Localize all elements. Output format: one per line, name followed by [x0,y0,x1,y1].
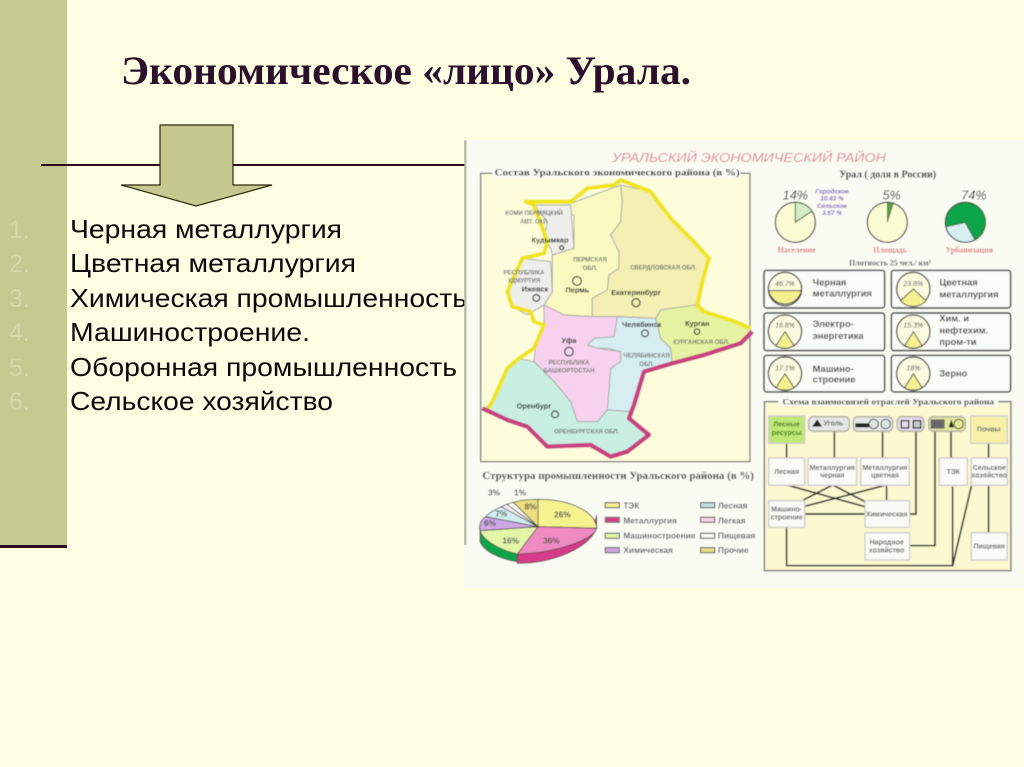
panel: industry links diagram: хозяйство [869,546,904,554]
sidebar list numbers: 1. [9,216,30,244]
panel: industry structure pie: Легкая [718,515,746,525]
panel title: УРАЛЬСКИЙ ЭКОНОМИЧЕСКИЙ РАЙОН [611,149,887,165]
panel: industry structure pie: Металлургия [623,515,677,525]
map labels: РЕСПУБЛИКА [504,270,545,276]
panel: region map: Пермь [565,286,590,295]
panel: share in Russia: металлургия [939,290,999,300]
pie: population: 3.57 % [822,210,842,217]
panel: industry links diagram: Схема взаимосвязей отраслей Уральского района [782,396,995,406]
panel: share in Russia: 23.8% [902,281,923,288]
pie: area: Площадь [873,245,908,254]
panel: industry links diagram: ТЭК [947,469,961,476]
panel: industry links diagram: Химическая [866,511,907,518]
panel: share in Russia: Цветная [939,277,978,287]
panel: industry links diagram: цветная [871,473,899,480]
panel: share in Russia: 18% [906,365,920,372]
map labels: ОБЛ. [639,362,654,368]
map labels: УДМУРТИЯ [508,279,540,285]
pie: urbanisation: Урбанизация [946,245,994,254]
map labels: СВЕРДЛОВСКАЯ ОБЛ. [630,265,697,271]
map labels: ОБЛ. [583,266,598,272]
panel: industry structure pie: Прочие [718,545,749,555]
pie: urbanisation: 74% [961,189,987,203]
sector boxes [769,458,1007,560]
panel: industry structure pie: 6% [484,518,497,528]
panel: industry structure pie: 16% [502,535,520,545]
panel: share in Russia: Зерно [939,368,968,378]
panel: industry links diagram: Почвы [977,427,1000,434]
panel: share in Russia: Электро- [813,319,854,329]
panel: share in Russia: 16.8% [775,323,795,330]
sidebar list numbers [9,216,30,416]
panel: share in Russia: нефтехим. [939,326,988,336]
map labels: АВТ. ОКР. [520,219,548,225]
panel: region map: Ижевск [522,285,549,294]
panel: industry links diagram: строение [771,514,803,521]
panel: industry links diagram: черная [820,473,845,480]
panel: industry links diagram: Металлургия [862,465,908,472]
panel: industry links diagram: Металлургия [810,465,855,472]
panel: industry links diagram: Пищевая [974,544,1005,551]
map labels: КОМИ ПЕРМЯЦКИЙ [505,209,563,217]
panel: industry links diagram: Лесная [774,469,799,476]
industries list: Оборонная промышленность [70,352,457,382]
sidebar list numbers: 6. [9,388,30,416]
industries list: Машиностроение. [70,317,310,347]
industries list: Черная металлургия [70,214,342,244]
panel: region map: Кудымкар [532,235,569,244]
map labels: БАШКОРТОСТАН [544,368,594,374]
left sidebar band [0,0,67,548]
panel: share in Russia [764,169,1011,392]
panel: share in Russia: Урал ( доля в России) [839,169,936,180]
panel: industry structure pie: 3% [488,487,501,497]
industries list [70,214,467,416]
panel: industry structure pie: Пищевая [718,530,755,540]
pie: population: 10.43 % [820,196,844,203]
panel: industry links diagram: Народное [870,539,904,546]
panel: region map [481,168,752,462]
panel: industry links diagram: ресурсы [772,430,802,437]
resource boxes [769,416,1007,443]
panel: industry structure pie: Машиностроение [623,530,696,540]
panel: industry structure pie: 1% [514,487,527,497]
panel: region map: Курган [685,319,710,328]
pie: area [867,189,908,254]
pie: urbanisation [945,189,994,254]
panel: share in Russia: 17.1% [775,365,795,372]
panel: industry links diagram: Сельское [973,465,1006,472]
industries list: Сельское хозяйство [70,386,333,416]
panel: region map: Екатеринбург [611,288,661,297]
panel: share in Russia: энергетика [813,331,864,341]
panel: Ural economic region plate [464,140,1024,588]
panel: industry structure pie: 8% [525,501,537,511]
panel: share in Russia: металлургия [813,288,872,298]
panel: industry links diagram: Машино- [771,506,803,513]
sidebar list numbers: 5. [9,354,30,382]
map regions [484,185,751,457]
panel: share in Russia: строение [813,375,856,385]
pie: area: 5% [883,189,901,203]
panel: industry structure pie: 26% [554,509,571,519]
panel: region map: Уфа [561,336,577,345]
pink border [482,332,752,457]
sidebar list numbers: 2. [9,250,30,278]
yellow border [487,180,751,410]
map labels: ЧЕЛЯБИНСКАЯ [624,354,670,360]
panel: share in Russia: Хим. и [939,314,969,324]
panel: industry links diagram: Лесные [773,421,800,428]
map labels: КУРГАНСКАЯ ОБЛ. [673,340,730,346]
panel: industry structure pie: ТЭК [623,500,640,510]
panel: region map: Оренбург [517,401,551,410]
map labels: РЕСПУБЛИКА [549,360,590,366]
industries list: Химическая промышленность [70,283,467,313]
density label: Плотность 25 чел./ км² [849,259,932,268]
resource glyphs [812,419,954,429]
industries list: Цветная металлургия [70,248,356,278]
panel: industry links diagram [764,396,1011,571]
panel: industry structure pie: Структура промышленности Уральского района (в %) [482,471,754,482]
panel: region map: Челябинск [622,320,662,329]
icon: down arrow [121,125,272,206]
sidebar list numbers: 4. [9,319,30,347]
panel: industry structure pie: 36% [543,535,560,545]
title: Экономическое «лицо» Урала. [121,48,691,93]
panel: industry structure pie: 7% [495,509,508,519]
pie: population [775,188,849,254]
sidebar list numbers: 3. [9,285,30,313]
industry share cards [764,270,1011,392]
panel: industry links diagram: Уголь [823,421,843,428]
map labels: ПЕРМСКАЯ [573,258,607,264]
legend [605,503,715,553]
panel: share in Russia: пром-ти [939,337,977,347]
panel: share in Russia: 15.3% [903,323,923,330]
panel: industry structure pie [480,471,755,563]
pie: population: Сельское [817,203,847,210]
pie: population: Городское [815,188,849,196]
connectors [787,432,989,566]
panel: industry links diagram: хозяйство [972,472,1007,480]
heading rule [41,164,466,166]
panel: industry structure pie: Химическая [623,545,673,555]
panel: share in Russia: Черная [813,277,846,287]
map labels: ОРЕНБУРГСКАЯ ОБЛ. [554,429,620,435]
panel: share in Russia: Машино- [813,364,854,374]
panel: share in Russia: 46.7% [775,281,795,288]
pie: population: Население [778,245,816,254]
map labels [504,209,730,435]
pie chart [480,499,597,563]
panel: region map: Состав Уральского экономического района (в %) [495,168,740,179]
panel: industry structure pie: Лесная [718,500,748,510]
pie: population: 14% [783,189,808,203]
